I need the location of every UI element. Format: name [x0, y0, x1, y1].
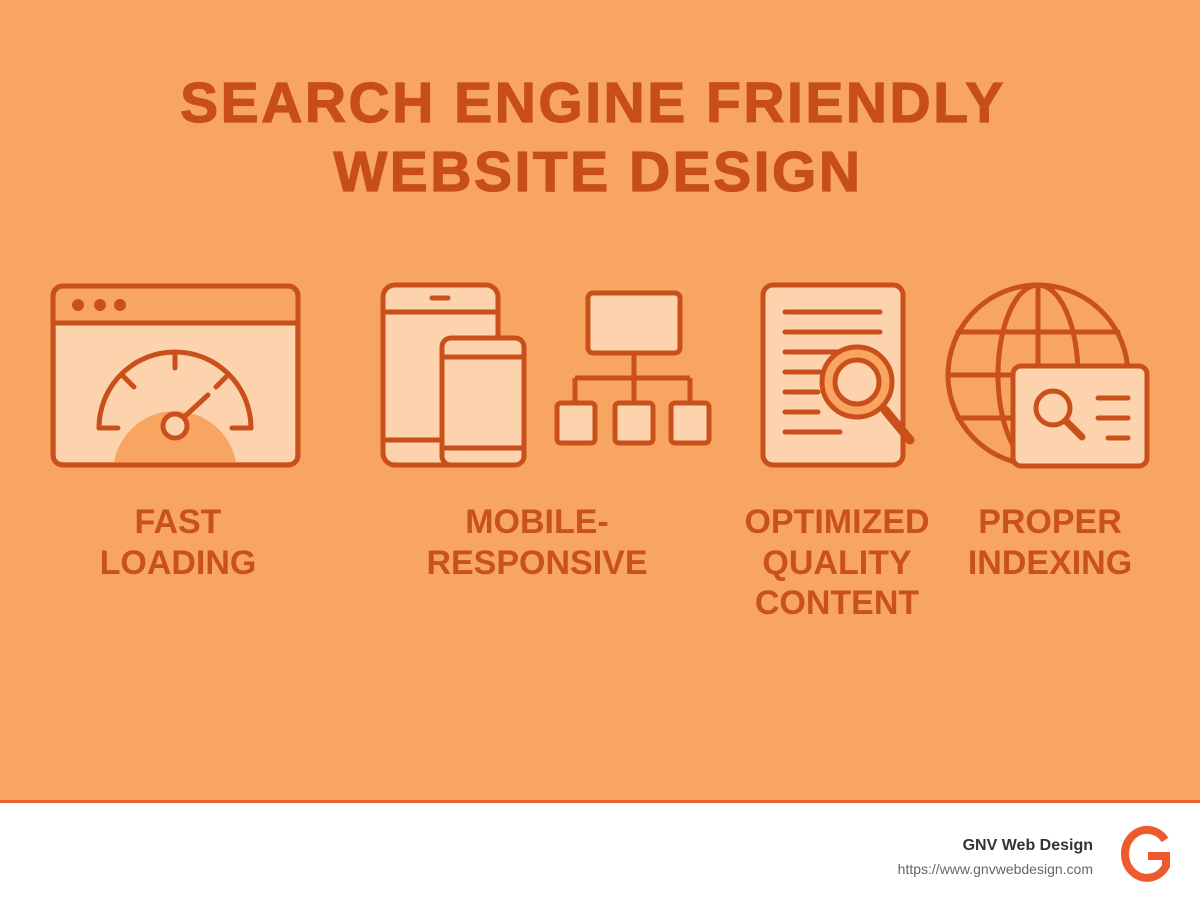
labels: MOBILE- [465, 503, 609, 541]
labels: PROPER [978, 503, 1122, 541]
title [180, 71, 1006, 204]
labels: QUALITY [762, 544, 912, 582]
footer brand: https://www.gnvwebdesign.com [898, 861, 1093, 877]
title: WEBSITE DESIGN [333, 140, 863, 204]
labels: LOADING [100, 544, 256, 582]
footer brand: GNV Web Design [963, 837, 1093, 854]
icon: document with magnifier [763, 285, 910, 465]
icon: globe with search card [948, 285, 1147, 466]
icon: sitemap [557, 293, 709, 443]
labels: INDEXING [968, 544, 1132, 582]
title: SEARCH ENGINE FRIENDLY [180, 71, 1006, 135]
labels: FAST [135, 503, 222, 541]
labels [100, 503, 1132, 622]
icon: mobile devices [383, 285, 524, 465]
labels: CONTENT [755, 584, 919, 622]
footer brand [898, 837, 1093, 877]
icon: G logo [1125, 830, 1166, 878]
icon: fast loading browser speedometer [53, 286, 298, 465]
labels: OPTIMIZED [744, 503, 930, 541]
labels: RESPONSIVE [426, 544, 648, 582]
